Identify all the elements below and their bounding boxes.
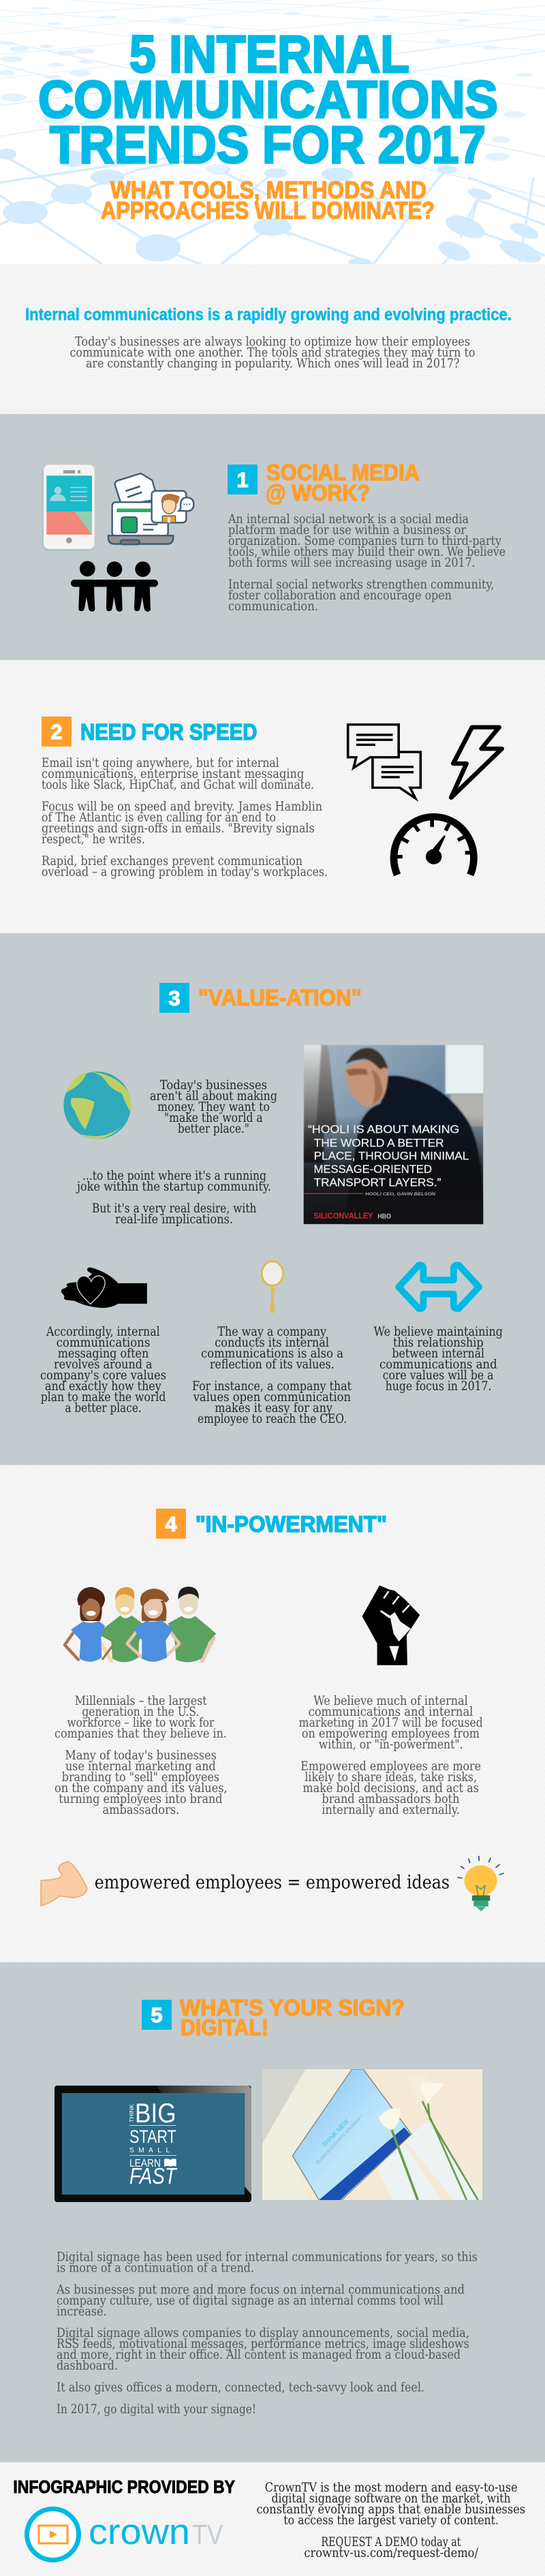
text column: in-powerment: marketing in 2017 will be focused	[299, 1715, 483, 1730]
photo: Silicon Valley quote: SILICONVALLEY	[314, 1211, 373, 1221]
text column: core values: communications	[57, 1335, 150, 1350]
body text: is more of a continuation of a trend.	[57, 2260, 254, 2275]
body text: An internal social network is a social media	[228, 512, 469, 527]
text: make the world better: aren't all about making	[150, 1088, 277, 1103]
photo: Silicon Valley quote: HBO	[377, 1213, 391, 1221]
photo: Silicon Valley quote: PLACE, THROUGH MINIMAL	[314, 1150, 469, 1163]
heading: @ WORK?	[266, 480, 370, 505]
text column: reflection of values: communications is also a	[201, 1346, 343, 1361]
text column: in-powerment: on empowering employees from	[302, 1726, 480, 1741]
text column: maintaining relationship: We believe maintaining	[373, 1324, 503, 1339]
title: 5 INTERNAL	[129, 25, 409, 84]
number badge 4: 4	[165, 1512, 177, 1536]
body text: foster collaboration and encourage open	[228, 588, 452, 603]
subtitle: WHAT TOOLS, METHODS AND	[110, 177, 426, 204]
panel: intro	[0, 264, 545, 414]
icon: hand with heart	[61, 1268, 147, 1308]
number badge 1: 1	[236, 468, 249, 492]
panel: footer	[0, 2462, 545, 2576]
title: COMMUNICATIONS	[38, 71, 498, 129]
text column: millennials: Millennials – the largest	[75, 1693, 207, 1708]
photo: tilted digital sign with calla lilies: THINK NEW	[321, 2118, 351, 2149]
body text: respect," he writes.	[42, 832, 145, 847]
body text: Digital signage has been used for internal communications for years, so this	[57, 2249, 478, 2264]
intro paragraph: communicate with one another. The tools and strategies they may turn to	[69, 345, 476, 360]
body text: In 2017, go digital with your signage!	[57, 2402, 256, 2417]
text column: millennials	[54, 1693, 228, 1817]
number badge 4	[156, 1509, 186, 1539]
body text: and more, right in their office. All content is managed from a cloud-based	[57, 2347, 461, 2362]
text column: core values: plan to make the world	[41, 1389, 166, 1404]
number badge 3: 3	[168, 986, 181, 1010]
body text: tools like Slack, HipChat, and Gchat will dominate.	[42, 777, 314, 792]
text: make the world better	[150, 1078, 277, 1136]
number badge 3	[159, 983, 189, 1013]
number badge 1	[228, 465, 258, 494]
photo: Silicon Valley quote: HOOLI CEO, GAVIN BELSON	[365, 1193, 436, 1197]
text column: millennials: companies that they believe in.	[54, 1726, 227, 1741]
body text: Email isn't going anywhere, but for internal	[42, 755, 279, 770]
heading: SOCIAL MEDIA	[266, 460, 420, 485]
body text: Rapid, brief exchanges prevent communication	[42, 853, 302, 868]
panel: header	[0, 0, 545, 267]
body text: of The Atlantic is even calling for an end to	[42, 810, 276, 825]
heading: "VALUE-ATION"	[198, 985, 362, 1010]
company description: to access the largest variety of content.	[283, 2513, 499, 2528]
body text: RSS feeds, motivational messages, performance metrics, image slideshows	[57, 2336, 469, 2351]
body text: As businesses put more and more focus on internal communications and	[56, 2282, 465, 2297]
icon: three linked people	[71, 561, 158, 612]
heading: WHAT'S YOUR SIGN?	[180, 1995, 405, 2020]
icon: laptop with contact card	[108, 473, 193, 544]
heading: DIGITAL!	[181, 2015, 268, 2040]
text: running joke: joke within the startup community.	[76, 1179, 271, 1194]
logo: CrownTV	[27, 2509, 223, 2560]
text: running joke: ...to the point where it's a running	[82, 1168, 266, 1183]
number badge 5: 5	[151, 2003, 163, 2027]
body text: company culture, use of digital signage as an internal comms tool will	[57, 2293, 443, 2308]
text column: in-powerment: internally and externally.	[322, 1802, 460, 1817]
body text: Focus will be on speed and brevity. James Hamblin	[42, 799, 322, 814]
text column: reflection of values: The way a company	[217, 1324, 326, 1339]
number badge 2	[42, 717, 72, 747]
text column: maintaining relationship: huge focus in 2017.	[386, 1379, 491, 1394]
body text: both forms will see increasing usage in 2017.	[228, 555, 476, 570]
company description: crowntv-us.com/request-demo/	[304, 2545, 479, 2560]
illustration: wall display: SMALL	[129, 2147, 176, 2154]
text column: core values: a better place.	[65, 1400, 142, 1415]
icon: flexed arm	[41, 1862, 87, 1906]
text column: reflection of values: For instance, a company that	[192, 1379, 352, 1394]
text column: millennials: ambassadors.	[102, 1802, 179, 1817]
text: make the world better: money. They want to	[157, 1099, 270, 1114]
title	[38, 25, 498, 174]
text column: in-powerment	[299, 1693, 483, 1817]
icon: double arrow	[399, 1265, 479, 1308]
icon: phone	[42, 465, 95, 551]
text column: millennials: use internal marketing and	[65, 1759, 216, 1774]
subtitle: APPROACHES WILL DOMINATE?	[101, 198, 435, 224]
body text: organization. Some companies turn to third-party	[228, 533, 501, 548]
panel: section 3 value-ation	[0, 933, 545, 1465]
body text: communications, enterprise instant messaging	[42, 766, 304, 781]
heading	[180, 1995, 405, 2040]
photo: Silicon Valley quote: “HOOLI IS ABOUT MAKING	[308, 1122, 459, 1135]
text column: reflection of values: employee to reach the CEO.	[198, 1411, 347, 1426]
text column: in-powerment: brand ambassadors both	[322, 1791, 459, 1806]
panel: section 1 social media	[0, 414, 545, 660]
photo: Silicon Valley quote: THE WORLD A BETTER	[314, 1136, 444, 1149]
person: back left	[97, 1587, 145, 1662]
text column: in-powerment: We believe much of internal	[313, 1693, 468, 1708]
text column: in-powerment: Empowered employees are more	[300, 1759, 481, 1774]
equation text: empowered employees = empowered ideas	[95, 1872, 450, 1894]
logo: CrownTV: TV	[192, 2519, 223, 2550]
intro paragraph	[69, 334, 476, 371]
photo: Silicon Valley quote	[304, 1045, 484, 1226]
person: front right	[127, 1588, 179, 1662]
background network pattern	[0, 0, 545, 264]
icon: chat bubbles	[348, 725, 420, 798]
text column: in-powerment: within, or "in-powerment".	[319, 1737, 463, 1752]
illustration: wall display: BIG	[135, 2099, 176, 2129]
text: make the world better: "make the world a	[164, 1110, 263, 1125]
photo: Silicon Valley quote: MESSAGE-ORIENTED	[314, 1163, 432, 1176]
text column: core values	[40, 1324, 166, 1415]
body text: It also gives offices a modern, connected, tech-savvy look and feel.	[57, 2380, 424, 2395]
text column: maintaining relationship: core values will be a	[383, 1368, 493, 1383]
icon: light bulb	[457, 1856, 504, 1911]
body text: Internal social networks strengthen community,	[228, 577, 495, 592]
text column: in-powerment: likely to share ideas, take risks,	[305, 1770, 477, 1785]
text column: core values: and exactly how they	[45, 1379, 161, 1394]
body text: communication.	[228, 599, 318, 614]
text column: core values: company's core values	[40, 1368, 166, 1383]
icon: raised fist	[362, 1586, 420, 1665]
text: running joke	[76, 1168, 271, 1227]
text column: maintaining relationship: communications and	[379, 1357, 497, 1372]
person: back right	[168, 1586, 216, 1662]
icon: lightning bolt	[451, 727, 502, 798]
heading: "IN-POWERMENT"	[196, 1511, 387, 1537]
illustration: wall display: THINK	[129, 2103, 135, 2122]
company description	[256, 2480, 525, 2560]
photo: tilted digital sign with calla lilies	[262, 2069, 482, 2200]
photo: Silicon Valley quote: TRANSPORT LAYERS.”	[314, 1176, 441, 1189]
text column: millennials: generation in the U.S.	[82, 1704, 199, 1719]
body text: greetings and sign-offs in emails. "Brevity signals	[42, 821, 315, 836]
heading	[266, 460, 420, 505]
icon: hand mirror	[262, 1261, 283, 1314]
person: front left	[65, 1587, 112, 1662]
illustration: four employees	[65, 1586, 216, 1662]
text column: in-powerment: make bold decisions, and act as	[302, 1780, 479, 1795]
text: running joke: But it's a very real desire, with	[92, 1201, 256, 1216]
text column: millennials: workforce – like to work for	[67, 1715, 215, 1730]
body text	[42, 755, 328, 879]
photo: tilted digital sign with calla lilies: Audacieusement novateur !	[314, 2113, 364, 2166]
text column: maintaining relationship: this relationship	[393, 1335, 484, 1350]
text column: core values: messaging often	[58, 1346, 149, 1361]
illustration: wall display: FAST	[129, 2163, 178, 2188]
icon: speedometer	[393, 817, 474, 875]
text: make the world better: better place."	[178, 1121, 249, 1136]
text column: millennials: branding to "sell" employees	[62, 1770, 219, 1785]
text column: millennials: Many of today's businesses	[65, 1748, 217, 1763]
text column: core values: revolves around a	[54, 1357, 153, 1372]
icon: globe	[63, 1071, 131, 1139]
number badge 5	[142, 2000, 172, 2030]
body text	[228, 512, 505, 614]
text column: reflection of values: makes it easy for any	[215, 1400, 332, 1415]
illustration: wall display: LEARN	[129, 2158, 161, 2169]
body text: dashboard.	[57, 2358, 118, 2373]
text: running joke: real-life implications.	[115, 1212, 233, 1227]
text column: maintaining relationship: between internal	[392, 1346, 484, 1361]
text column: millennials: on the company and its values,	[54, 1780, 228, 1795]
illustration: wall display	[54, 2086, 251, 2202]
text column: in-powerment: communications and internal	[309, 1704, 473, 1719]
title: TRENDS FOR 2017	[50, 116, 486, 174]
company description: REQUEST A DEMO today at	[321, 2534, 461, 2549]
text: make the world better: Today's businesses	[160, 1078, 267, 1093]
illustration: wall display: START	[129, 2126, 176, 2147]
text column: reflection of values: conducts its internal	[215, 1335, 329, 1350]
body text: overload – a growing problem in today's workplaces.	[42, 864, 328, 879]
text column: maintaining relationship	[373, 1324, 503, 1394]
provided by label: INFOGRAPHIC PROVIDED BY	[13, 2477, 235, 2497]
body text	[56, 2249, 478, 2417]
logo: CrownTV: crown	[89, 2512, 190, 2552]
heading: NEED FOR SPEED	[80, 719, 258, 744]
body text: increase.	[57, 2304, 107, 2319]
panel: section 5 digital signage	[0, 1962, 545, 2462]
intro paragraph: are constantly changing in popularity. Which ones will lead in 2017?	[86, 356, 459, 371]
text column: reflection of values: reflection of its values.	[210, 1357, 334, 1372]
text column: reflection of values: values open communication	[193, 1389, 351, 1404]
subtitle	[101, 177, 435, 224]
body text: platform made for use within a business or	[228, 522, 467, 537]
text column: reflection of values	[192, 1324, 352, 1426]
number badge 2: 2	[50, 720, 63, 744]
text column: millennials: turning employees into brand	[59, 1791, 222, 1806]
intro paragraph: Today's businesses are always looking to optimize how their employees	[75, 334, 470, 349]
panel: section 4 in-powerment	[0, 1465, 545, 1962]
panel: section 2 need for speed	[0, 660, 545, 933]
text column: core values: Accordingly, internal	[46, 1324, 160, 1339]
body text: Digital signage allows companies to display announcements, social media,	[57, 2325, 469, 2340]
